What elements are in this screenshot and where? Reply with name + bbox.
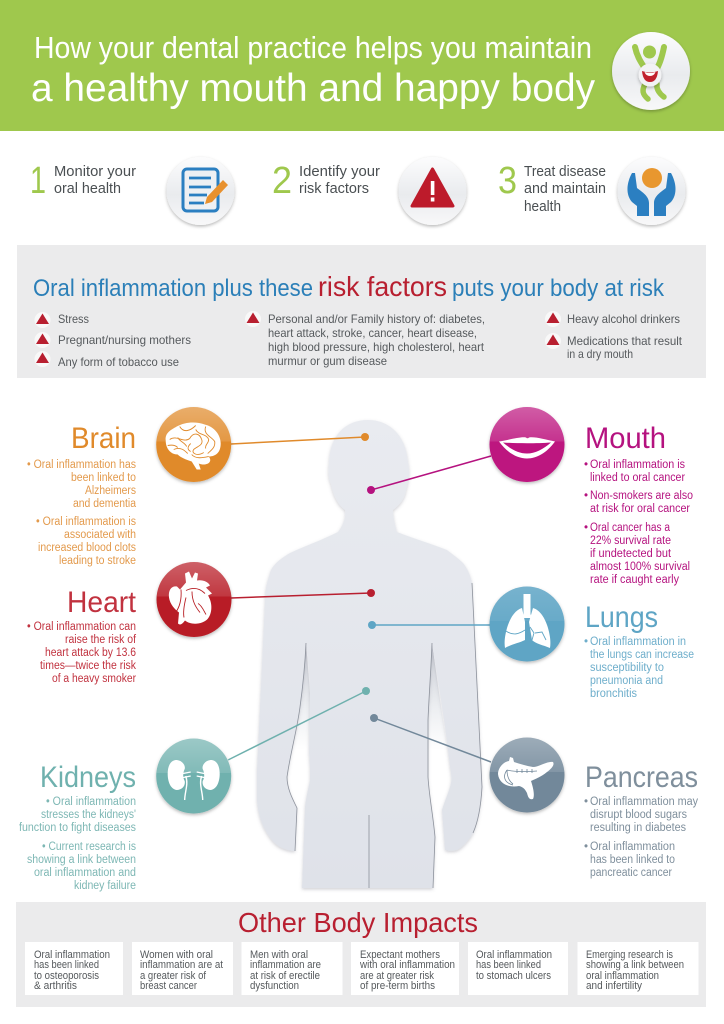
- section: mouth: if undetected but: [590, 548, 672, 560]
- section: brain: [27, 422, 137, 567]
- section: mouth: rate if caught early: [590, 574, 679, 586]
- header banner: [0, 0, 724, 131]
- card: osteoporosis: & arthritis: [34, 980, 78, 992]
- heading: other body impacts: Other Body Impacts: [238, 907, 478, 938]
- list: right column: Medications that result: [567, 334, 683, 348]
- card: stomach ulcers: to stomach ulcers: [476, 970, 552, 982]
- section: lungs: •: [584, 636, 588, 648]
- connector: brain: [231, 433, 369, 444]
- section: brain: leading to stroke: [59, 555, 136, 567]
- card: infertility: [578, 942, 698, 995]
- section: pancreas: has been linked to: [590, 854, 675, 866]
- icon: hands holding person: [618, 157, 686, 225]
- card: breast cancer: breast cancer: [140, 980, 197, 992]
- list: right column: [545, 311, 683, 361]
- section: mouth: Non-smokers are also: [590, 490, 693, 502]
- section: lungs: Oral inflammation in: [590, 636, 686, 648]
- icon: kidneys: [156, 736, 231, 814]
- step 1: monitor: [30, 157, 234, 225]
- title: [31, 31, 595, 110]
- section: kidneys: stresses the kidneys': [41, 809, 136, 821]
- card: osteoporosis: has been linked: [34, 959, 99, 971]
- card: erectile dysfunction: inflammation are: [250, 959, 321, 971]
- section: pancreas: •: [584, 841, 588, 853]
- section: mouth: •: [584, 459, 588, 471]
- section: kidneys: showing a link between: [27, 854, 136, 866]
- human body silhouette: [257, 420, 482, 888]
- card: pre-term births: Expectant mothers: [360, 949, 441, 961]
- card: osteoporosis: to osteoporosis: [34, 970, 100, 982]
- connector: lungs: [368, 621, 490, 629]
- section: mouth: almost 100% survival: [590, 561, 690, 573]
- section: mouth: •: [584, 490, 588, 502]
- section: brain: increased blood clots: [38, 542, 136, 554]
- icon: mouth: [490, 404, 564, 482]
- panel: risk factors: [17, 245, 706, 378]
- icon: pancreas: [490, 734, 564, 812]
- card: erectile dysfunction: Men with oral: [250, 949, 308, 961]
- card: stomach ulcers: Oral inflammation: [476, 949, 552, 961]
- section: mouth: Oral cancer has a: [590, 522, 671, 534]
- section: brain: • Oral inflammation has: [27, 459, 136, 471]
- step 2: identify: risk factors: [299, 181, 369, 197]
- section: mouth: [584, 422, 693, 586]
- step 1: monitor: oral health: [54, 181, 121, 197]
- title: How your dental practice helps you maintain: [34, 31, 592, 65]
- icon: brain: [156, 404, 231, 482]
- section: brain: Brain: [71, 422, 136, 455]
- section: brain: been linked to: [71, 472, 136, 484]
- section: mouth: •: [584, 522, 588, 534]
- section: heart: [27, 586, 137, 685]
- connector: pancreas: [370, 714, 491, 762]
- card: erectile dysfunction: [242, 942, 342, 995]
- card: erectile dysfunction: dysfunction: [250, 980, 299, 992]
- card: infertility: Emerging research is: [586, 949, 674, 961]
- heading: risk factors: risk factors: [318, 271, 447, 302]
- section: pancreas: Pancreas: [585, 761, 698, 794]
- connector: kidneys: [228, 687, 370, 760]
- step 3: treat: 3: [498, 160, 517, 202]
- list: middle column: murmur or gum disease: [268, 354, 387, 368]
- section: pancreas: disrupt blood sugars: [590, 809, 687, 821]
- card: breast cancer: Women with oral: [140, 949, 213, 961]
- heading: risk factors: Oral inflammation plus these: [33, 275, 313, 302]
- card: pre-term births: of pre-term births: [360, 980, 436, 992]
- section: brain: Alzheimers: [85, 485, 136, 497]
- step 3: treat: Treat disease: [524, 164, 606, 180]
- card: osteoporosis: Oral inflammation: [34, 949, 110, 961]
- step 1: monitor: 1: [30, 160, 46, 202]
- list: middle column: Personal and/or Family history of: diabetes,: [268, 312, 485, 326]
- card: osteoporosis: [25, 942, 123, 995]
- section: heart: raise the risk of: [65, 634, 137, 646]
- list: right column: Heavy alcohol drinkers: [567, 312, 680, 326]
- list: middle column: [245, 311, 485, 368]
- section: lungs: Lungs: [585, 601, 658, 634]
- panel: other body impacts: [16, 902, 706, 1007]
- connector: heart: [231, 589, 375, 598]
- card: stomach ulcers: has been linked: [476, 959, 541, 971]
- list: left column: Stress: [58, 312, 89, 326]
- card: breast cancer: inflammation are at: [140, 959, 223, 971]
- icon: heart: [156, 559, 232, 637]
- icon: warning triangle: [398, 157, 466, 225]
- section: lungs: pneumonia and: [590, 675, 663, 687]
- section: pancreas: resulting in diabetes: [590, 822, 686, 834]
- step 2: identify: 2: [272, 160, 292, 202]
- list: left column: Pregnant/nursing mothers: [58, 333, 191, 347]
- title: a healthy mouth and happy body: [31, 67, 595, 110]
- step 2: identify: Identify your: [299, 164, 380, 180]
- heading: risk factors: [33, 271, 665, 302]
- section: heart: Heart: [67, 586, 136, 619]
- section: kidneys: • Current research is: [42, 841, 136, 853]
- section: heart: • Oral inflammation can: [27, 621, 136, 633]
- section: kidneys: Kidneys: [40, 761, 136, 794]
- section: mouth: at risk for oral cancer: [590, 503, 690, 515]
- section: pancreas: Oral inflammation may: [590, 796, 698, 808]
- card: breast cancer: [132, 942, 233, 995]
- section: pancreas: •: [584, 796, 588, 808]
- list: left column: [34, 312, 191, 369]
- section: lungs: [584, 601, 694, 700]
- section: kidneys: function to fight diseases: [19, 822, 136, 834]
- list: right column: in a dry mouth: [567, 347, 633, 361]
- section: brain: • Oral inflammation is: [36, 516, 136, 528]
- section: pancreas: pancreatic cancer: [590, 867, 672, 879]
- section: kidneys: • Oral inflammation: [46, 796, 136, 808]
- section: lungs: bronchitis: [590, 688, 637, 700]
- icon: lungs: [490, 584, 564, 662]
- card: pre-term births: [351, 942, 459, 995]
- section: lungs: the lungs can increase: [590, 649, 694, 661]
- card: pre-term births: are at greater risk: [360, 970, 435, 982]
- step 3: treat: health: [524, 199, 561, 215]
- card: stomach ulcers: [468, 942, 568, 995]
- icon: happy figure logo: [612, 32, 690, 110]
- step 3: treat: [498, 157, 686, 225]
- section: kidneys: oral inflammation and: [34, 867, 136, 879]
- section: brain: associated with: [64, 529, 136, 541]
- list: left column: Any form of tobacco use: [58, 355, 179, 369]
- connector: mouth: [367, 456, 491, 494]
- list: middle column: high blood pressure, high cholesterol, heart: [268, 340, 485, 354]
- icon: document and pencil: [166, 157, 234, 225]
- section: kidneys: kidney failure: [74, 880, 136, 892]
- section: heart: of a heavy smoker: [52, 673, 136, 685]
- card: infertility: showing a link between: [586, 959, 684, 971]
- section: mouth: 22% survival rate: [590, 535, 671, 547]
- step 3: treat: and maintain: [524, 181, 606, 197]
- section: brain: and dementia: [73, 498, 137, 510]
- section: pancreas: Oral inflammation: [590, 841, 675, 853]
- card: pre-term births: with oral inflammation: [359, 959, 455, 971]
- section: mouth: Mouth: [585, 422, 666, 455]
- section: pancreas: [584, 761, 698, 879]
- step 1: monitor: Monitor your: [54, 164, 136, 180]
- list: middle column: heart attack, stroke, cancer, heart disease,: [268, 326, 477, 340]
- section: mouth: linked to oral cancer: [590, 472, 685, 484]
- card: breast cancer: a greater risk of: [140, 970, 207, 982]
- section: lungs: susceptibility to: [590, 662, 664, 674]
- section: mouth: Oral inflammation is: [590, 459, 685, 471]
- section: heart: heart attack by 13.6: [45, 647, 136, 659]
- card: infertility: oral inflammation: [586, 970, 659, 982]
- card: infertility: and infertility: [586, 980, 643, 992]
- card: erectile dysfunction: at risk of erectile: [250, 970, 320, 982]
- heading: risk factors: puts your body at risk: [452, 275, 665, 302]
- section: heart: times—twice the risk: [40, 660, 136, 672]
- section: kidneys: [19, 761, 136, 892]
- step 2: identify: [272, 157, 466, 225]
